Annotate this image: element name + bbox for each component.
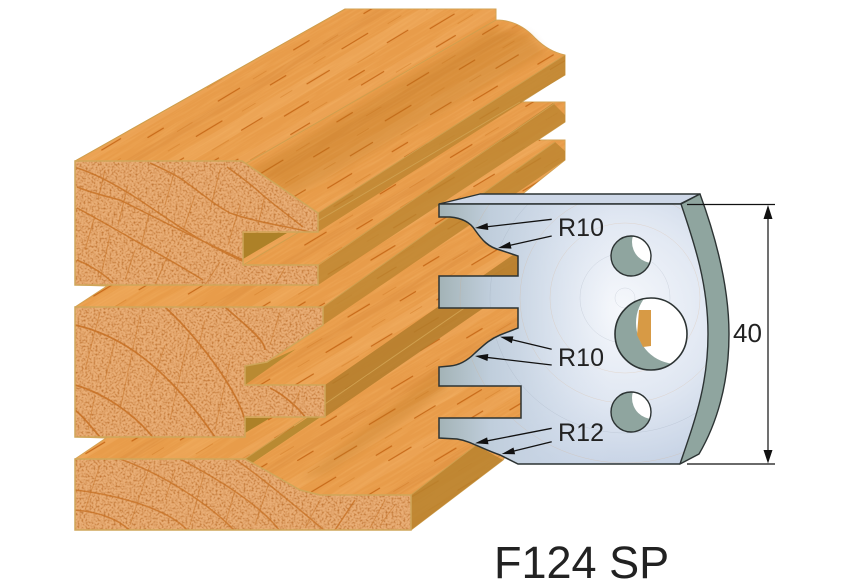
arrows: R10 upper xyxy=(475,219,552,249)
dimension arrowheads xyxy=(764,205,772,464)
shading on upper surface xyxy=(250,28,545,196)
fine grain overlay xyxy=(75,9,565,530)
end grain: bottom piece xyxy=(75,459,413,531)
label: R12: R12 xyxy=(558,419,604,447)
knife back bevel xyxy=(680,194,729,464)
dimension: height 40 xyxy=(687,204,775,464)
surface edge lines xyxy=(75,9,565,495)
end grain: top piece xyxy=(75,161,320,286)
knife body outline xyxy=(439,204,681,464)
end grain: middle piece xyxy=(75,307,327,440)
dark grain streaks xyxy=(75,9,565,530)
machining marks xyxy=(460,204,706,464)
label: R10 lower: R10 xyxy=(558,344,604,372)
side of bottom piece xyxy=(411,445,503,530)
centre hole xyxy=(614,297,688,371)
knife left shading xyxy=(439,204,620,464)
upper hole xyxy=(610,235,652,277)
knife body xyxy=(439,204,708,464)
middle groove xyxy=(245,349,296,385)
side of second strip xyxy=(323,142,565,325)
large side of middle strip xyxy=(325,250,520,417)
wood moulding xyxy=(75,9,565,531)
side of top step xyxy=(318,55,565,232)
upper groove xyxy=(243,233,287,259)
wood surfaces with grain xyxy=(75,9,565,530)
end face outlines xyxy=(75,161,411,530)
arrows: R12 xyxy=(475,428,552,454)
knife top bevel xyxy=(439,194,700,204)
label: R10 upper: R10 xyxy=(558,214,604,242)
arrows: R10 lower xyxy=(475,336,552,365)
dimension value: 40 xyxy=(733,318,762,348)
lower hole xyxy=(610,391,652,433)
cutter knife xyxy=(438,193,730,465)
side of upper strip xyxy=(318,103,565,285)
soft shading on lower surface xyxy=(300,368,448,480)
radius callouts xyxy=(475,214,604,454)
thin shaded channel xyxy=(245,416,322,468)
lower groove xyxy=(245,418,270,433)
dimension extension lines xyxy=(687,204,775,464)
